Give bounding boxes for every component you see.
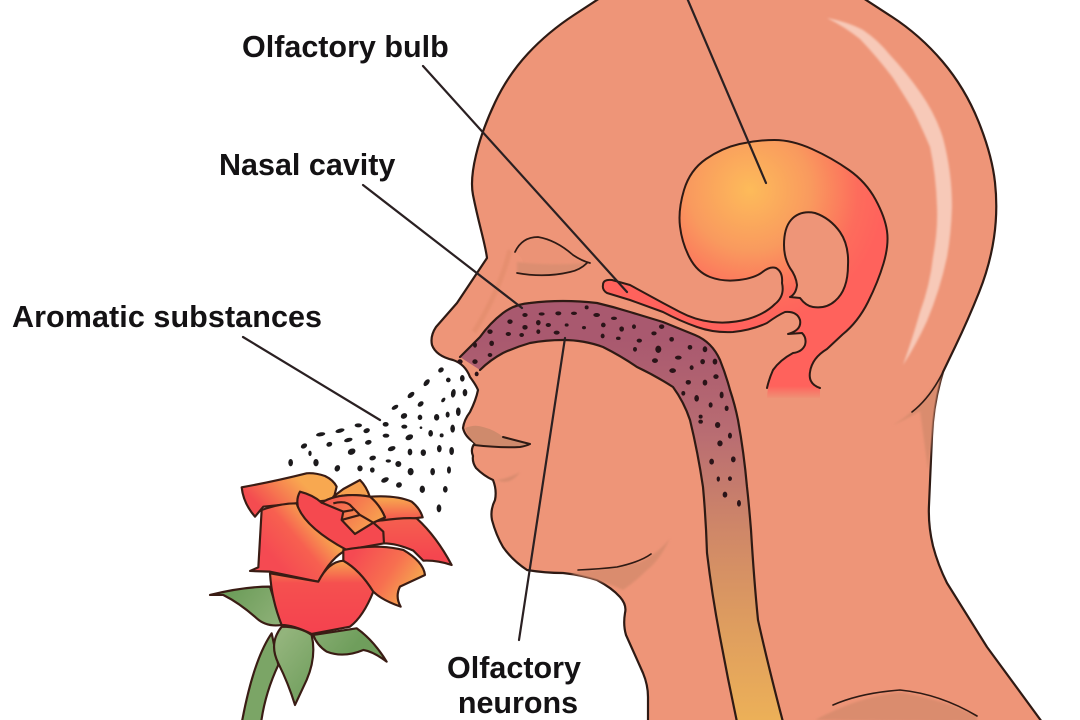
label: Olfactory neurons <box>447 338 581 720</box>
pointer line: upper brain <box>687 0 766 183</box>
shoulder crease <box>815 690 977 720</box>
inner hollow <box>784 212 848 307</box>
stem <box>242 633 278 720</box>
chin shading <box>497 472 520 482</box>
cavity lower wall <box>480 340 737 720</box>
nasal cavity passage <box>457 301 783 720</box>
label: Olfactory neurons: Olfactory <box>447 651 581 685</box>
front right petal <box>343 547 425 607</box>
centre leaf <box>274 627 313 705</box>
brain olfactory system <box>603 140 888 400</box>
top petal <box>333 480 370 503</box>
label: Aromatic substances <box>12 300 380 420</box>
brain base fade <box>760 386 826 400</box>
head highlight <box>827 18 952 365</box>
jaw crease <box>570 538 670 590</box>
label: Olfactory bulb <box>242 30 627 292</box>
rose <box>210 473 452 720</box>
head silhouette <box>432 0 1042 720</box>
brain outline <box>603 140 888 388</box>
label: Nasal cavity: Nasal cavity <box>219 148 395 182</box>
aromatic particles <box>288 366 467 512</box>
label: Nasal cavity <box>219 148 522 308</box>
back right petal <box>370 496 423 522</box>
lower cavity particles <box>698 420 741 507</box>
lips <box>465 426 530 447</box>
nose side shading <box>474 250 510 332</box>
left big petal <box>250 503 347 582</box>
cavity upper wall <box>460 301 783 720</box>
right petal <box>373 518 452 565</box>
label: Olfactory neurons: neurons <box>458 686 578 720</box>
cavity odour particles <box>457 305 729 419</box>
centre petals <box>297 492 385 550</box>
back petal <box>242 473 337 517</box>
brain fill <box>603 140 888 398</box>
left leaf <box>210 587 282 625</box>
bottom cup <box>270 561 373 634</box>
label: Olfactory bulb: Olfactory bulb <box>242 30 449 64</box>
right leaf <box>313 628 387 662</box>
label: Aromatic substances: Aromatic substances <box>12 300 322 334</box>
eye <box>515 237 590 275</box>
face details <box>465 237 977 720</box>
neck crease back <box>893 372 943 470</box>
